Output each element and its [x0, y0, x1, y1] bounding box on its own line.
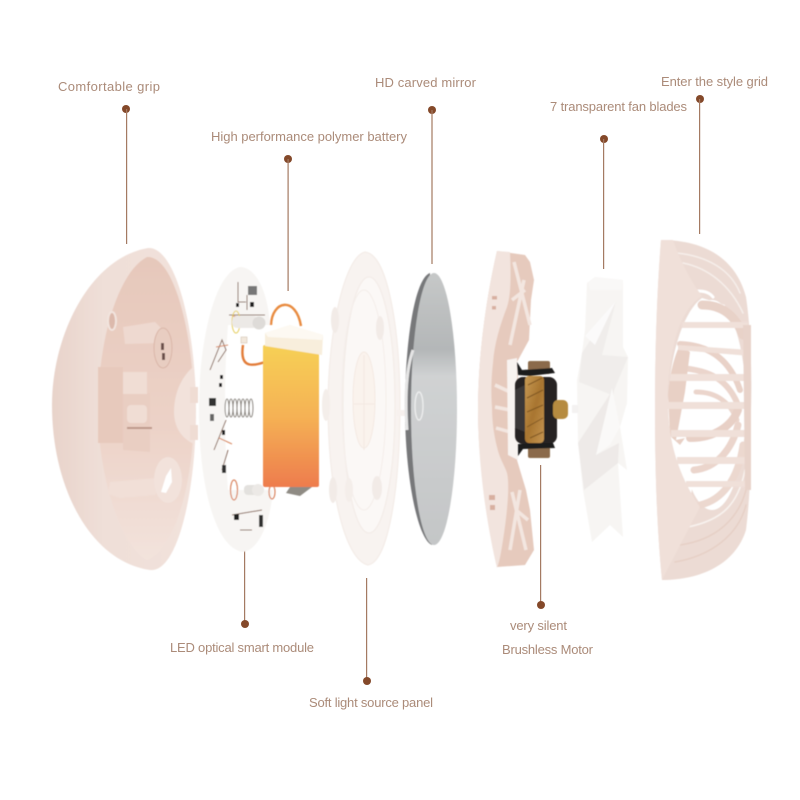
spring [225, 399, 253, 417]
LED module ring [199, 267, 323, 552]
wires [271, 305, 301, 326]
label: very silent Brushless Motor: Brushless Motor [502, 642, 594, 657]
curved inner ribs [675, 253, 746, 562]
battery [263, 345, 319, 487]
label: Enter the style grid [661, 74, 768, 234]
label: very silent Brushless Motor: very silent [510, 618, 567, 633]
front style grid [655, 240, 751, 580]
label: High performance polymer battery: High performance polymer battery [211, 129, 408, 144]
label: Comfortable grip: Comfortable grip [58, 79, 160, 94]
motor [515, 361, 568, 458]
label: Comfortable grip [58, 79, 160, 244]
label: LED optical smart module: LED optical smart module [170, 640, 314, 655]
mirror [405, 273, 457, 545]
back shell [52, 248, 198, 570]
motor bracket [478, 251, 534, 568]
label: Soft light source panel: Soft light source panel [309, 695, 433, 710]
label: High performance polymer battery [211, 129, 408, 291]
label: Enter the style grid: Enter the style grid [661, 74, 768, 89]
horizontal bars [668, 322, 751, 487]
label: HD carved mirror: HD carved mirror [375, 75, 477, 90]
label: HD carved mirror [375, 75, 477, 264]
label: Soft light source panel [309, 578, 433, 710]
label: 7 transparent fan blades [550, 99, 688, 269]
label: LED optical smart module [170, 550, 314, 655]
fan blades [572, 277, 628, 542]
label: 7 transparent fan blades: 7 transparent fan blades [550, 99, 688, 114]
label: very silent Brushless Motor [502, 465, 594, 657]
light source panel [322, 252, 406, 565]
